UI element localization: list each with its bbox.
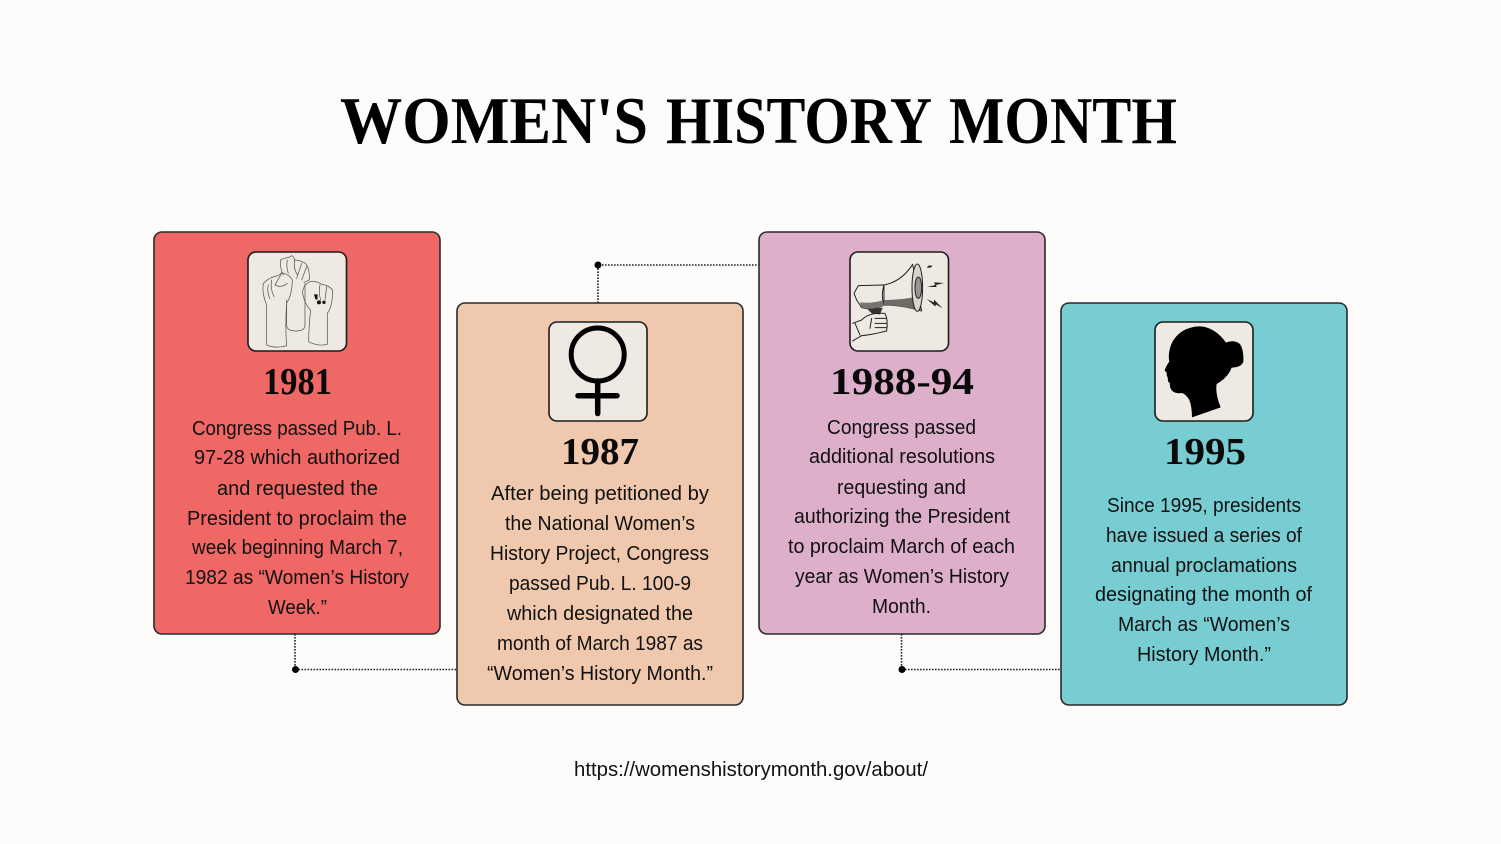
title: MONTH <box>949 84 1177 158</box>
text: 1987 description: “Women’s History Month.” <box>487 663 713 685</box>
panel: 1987 <box>457 303 743 705</box>
icon: female symbol <box>549 322 647 421</box>
icon: megaphone <box>850 252 948 351</box>
year: 1995: 1995 <box>1164 431 1246 473</box>
text: 1981 description: President to proclaim the <box>187 508 407 530</box>
text: 1995 description: have issued a series of <box>1106 525 1302 547</box>
text: 1981 description: 97-28 which authorized <box>194 447 400 469</box>
text: 1995 description <box>1095 495 1312 666</box>
text: 1981 description: week beginning March 7, <box>191 537 403 559</box>
connector: 1987 to 1988-94 <box>594 262 759 303</box>
year: 1988-94: 1988-94 <box>830 361 974 403</box>
icon: raised fists <box>248 252 346 351</box>
text: 1988-94 description: additional resolutions <box>809 446 995 468</box>
title: WOMEN'S <box>340 84 648 158</box>
text: 1988-94 description: Congress passed <box>827 417 976 439</box>
text: 1981 description: Week.” <box>268 597 327 619</box>
text: 1988-94 description: Month. <box>872 596 931 618</box>
text: 1995 description: Since 1995, presidents <box>1107 495 1301 517</box>
year: 1987: 1987 <box>561 431 639 473</box>
text: 1987 description: After being petitioned by <box>491 483 709 505</box>
text: 1988-94 description <box>788 417 1015 618</box>
text: 1988-94 description: to proclaim March of each <box>788 536 1015 558</box>
title <box>340 84 1177 158</box>
connector: 1988-94 to 1995 <box>898 634 1061 673</box>
connector: 1981 to 1987 <box>292 634 457 673</box>
source link: https://womenshistorymonth.gov/about/ <box>574 759 928 781</box>
text: 1995 description: March as “Women’s <box>1118 614 1290 636</box>
text: 1987 description: passed Pub. L. 100-9 <box>509 573 691 595</box>
text: 1995 description: History Month.” <box>1137 644 1271 666</box>
text: 1981 description: and requested the <box>217 478 378 500</box>
text: 1987 description: which designated the <box>506 603 693 625</box>
text: 1987 description: month of March 1987 as <box>497 633 703 655</box>
text: 1995 description: designating the month of <box>1095 584 1312 606</box>
text: 1988-94 description: requesting and <box>837 477 966 499</box>
text: 1987 description: the National Women’s <box>505 513 695 535</box>
text: 1981 description <box>185 418 409 619</box>
text: 1987 description <box>487 483 713 685</box>
panel: 1995 <box>1061 303 1347 705</box>
text: 1988-94 description: year as Women’s History <box>795 566 1009 588</box>
text: 1988-94 description: authorizing the President <box>794 506 1010 528</box>
text: 1981 description: Congress passed Pub. L. <box>192 418 402 440</box>
text: 1987 description: History Project, Congress <box>490 543 709 565</box>
icon: woman's silhouette <box>1155 322 1253 421</box>
title: HISTORY <box>666 84 932 158</box>
year: 1981: 1981 <box>263 361 332 403</box>
panel: 1981 <box>154 232 440 634</box>
panel: 1988-94 <box>759 232 1045 634</box>
text: 1981 description: 1982 as “Women’s History <box>185 567 409 589</box>
text: 1995 description: annual proclamations <box>1111 555 1297 577</box>
